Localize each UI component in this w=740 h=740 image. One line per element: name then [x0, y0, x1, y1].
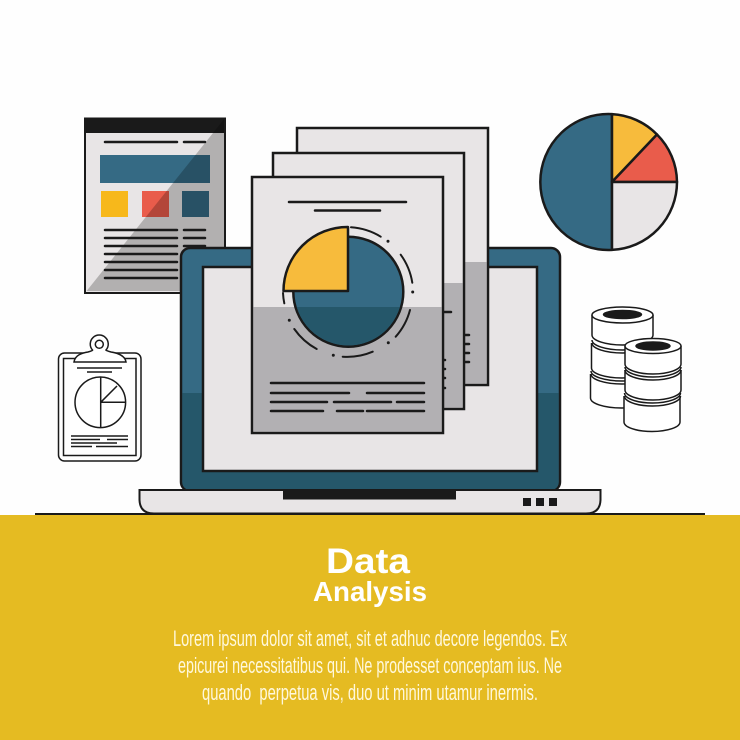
front database stack	[624, 338, 681, 432]
back report page	[297, 128, 488, 385]
clipboard board	[58, 353, 141, 461]
web page header bar	[85, 118, 225, 133]
middle report page	[273, 153, 464, 409]
web page text lines	[105, 142, 205, 278]
middle page text ticks	[443, 312, 451, 388]
icon: pie chart	[540, 114, 677, 250]
clipboard text lines	[71, 436, 128, 446]
body text	[173, 626, 567, 705]
red block	[142, 191, 169, 217]
heading: Analysis: Analysis	[313, 576, 427, 607]
body text: quando perpetua vis, duo ut minim utamur inermis.	[202, 680, 538, 705]
clipboard paper	[64, 358, 136, 456]
icon: database stacks	[590, 307, 681, 432]
pie slice: blue half	[540, 114, 612, 250]
clipboard title lines	[77, 368, 122, 372]
pie slice: yellow	[612, 114, 657, 182]
front report page	[252, 177, 443, 433]
front page title lines	[289, 202, 406, 210]
ground line	[35, 513, 705, 515]
laptop screen	[203, 267, 537, 471]
back database stack	[590, 307, 653, 408]
middle page shaded part	[274, 283, 462, 408]
pie slice: grey	[612, 182, 677, 250]
report pie yellow slice	[284, 227, 348, 291]
laptop indicator lights	[523, 498, 557, 506]
laptop base	[140, 490, 600, 514]
yellow block	[101, 191, 128, 217]
report pie chart	[283, 227, 414, 357]
heading: Data: Data	[326, 542, 411, 581]
report pie shaded part	[296, 307, 400, 346]
front page text lines	[271, 383, 424, 411]
front page shaded part	[254, 307, 442, 432]
icon: web page document	[85, 118, 225, 293]
pie slice: red	[612, 134, 677, 182]
web page diagonal shadow	[86, 133, 224, 291]
back page text ticks	[465, 335, 469, 362]
blue block	[182, 191, 209, 217]
report pie dashed ring	[283, 227, 414, 357]
yellow footer band	[0, 515, 740, 740]
clipboard clip	[74, 335, 126, 362]
icon: clipboard	[58, 335, 141, 461]
clipboard pie chart	[75, 377, 126, 428]
laptop	[140, 248, 600, 514]
clipboard clip hole	[95, 340, 103, 348]
laptop hinge notch	[283, 490, 456, 500]
web page banner	[100, 155, 210, 183]
laptop lid	[181, 248, 560, 491]
back page shaded part	[298, 262, 486, 384]
laptop lid shaded lower part	[182, 393, 558, 490]
